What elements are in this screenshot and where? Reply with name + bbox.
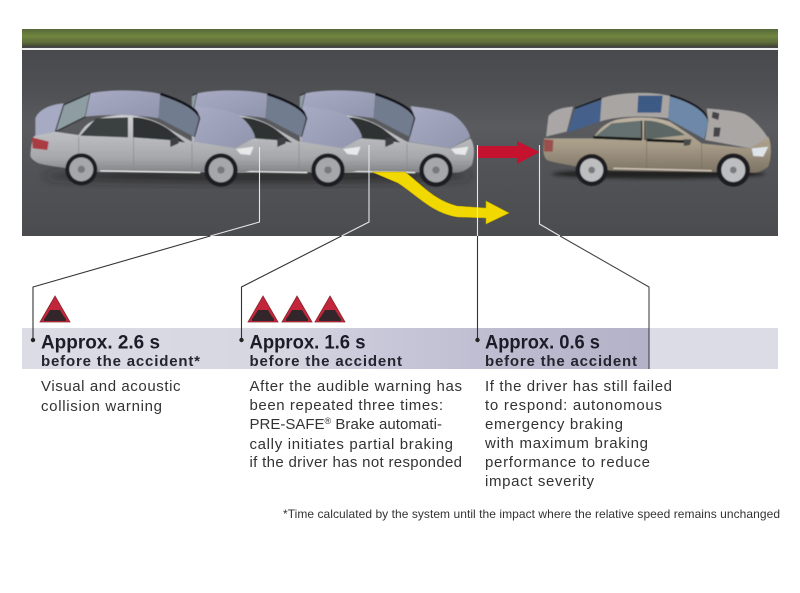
text block: 0.6 s stage: performance to reduce: [485, 454, 650, 471]
icon: warning triangles, three: [248, 296, 345, 322]
text block: 0.6 s stage: impact severity: [485, 473, 594, 490]
car: beige sedan ahead: [543, 93, 771, 187]
band: end section: [649, 328, 778, 369]
text block: 2.6 s stage: before the accident*: [41, 353, 200, 370]
photo panel: road scene: [22, 29, 778, 236]
text block: 0.6 s stage: If the driver has still failed: [485, 378, 672, 395]
icon: warning triangle, one: [40, 296, 70, 322]
text block: 1.6 s stage: PRE-SAFE: [250, 416, 325, 433]
text block: 2.6 s stage: Visual and acoustic: [41, 378, 181, 395]
text block: 1.6 s stage: [250, 332, 462, 471]
text block: 0.6 s stage: emergency braking: [485, 416, 623, 433]
band: timeline strip: [22, 328, 649, 369]
grass strip: [22, 29, 778, 47]
callout line 3: [475, 145, 480, 342]
text block: 0.6 s stage: before the accident: [485, 353, 637, 370]
text block: 1.6 s stage: After the audible warning has: [250, 378, 462, 395]
car: third position silver: [299, 90, 474, 188]
arrow: yellow evasive path: [372, 172, 509, 224]
callout line 2: [239, 145, 369, 342]
footnote: *Time calculated by the system until the impact where the relative speed remains unchanged: [283, 507, 780, 521]
text block: 1.6 s stage: ®: [325, 416, 332, 426]
road edge line: [22, 48, 778, 50]
text block: 1.6 s stage: before the accident: [250, 353, 402, 370]
road surface: [22, 47, 778, 236]
text block: 2.6 s stage: [41, 332, 200, 415]
car: first position silver: [30, 90, 259, 187]
callout line 1: [31, 147, 259, 342]
arrow: red straight ahead path: [477, 141, 540, 164]
text block: 0.6 s stage: Approx. 0.6 s: [485, 332, 600, 354]
car: second position silver: [191, 90, 363, 188]
callout line 4: [540, 145, 649, 369]
text block: 2.6 s stage: collision warning: [41, 398, 162, 415]
shadow under overlapping cars: [43, 171, 473, 181]
text block: 1.6 s stage: cally initiates partial braking: [250, 436, 453, 453]
text block: 0.6 s stage: with maximum braking: [484, 435, 648, 452]
text block: 1.6 s stage: if the driver has not responded: [250, 454, 462, 471]
text block: 1.6 s stage: been repeated three times:: [250, 397, 443, 414]
text block: 1.6 s stage: Approx. 1.6 s: [250, 332, 366, 354]
text block: 1.6 s stage: Brake automati-: [331, 416, 442, 433]
text block: 0.6 s stage: [484, 332, 672, 490]
text block: 0.6 s stage: to respond: autonomous: [485, 397, 662, 414]
text block: 2.6 s stage: Approx. 2.6 s: [41, 332, 160, 354]
